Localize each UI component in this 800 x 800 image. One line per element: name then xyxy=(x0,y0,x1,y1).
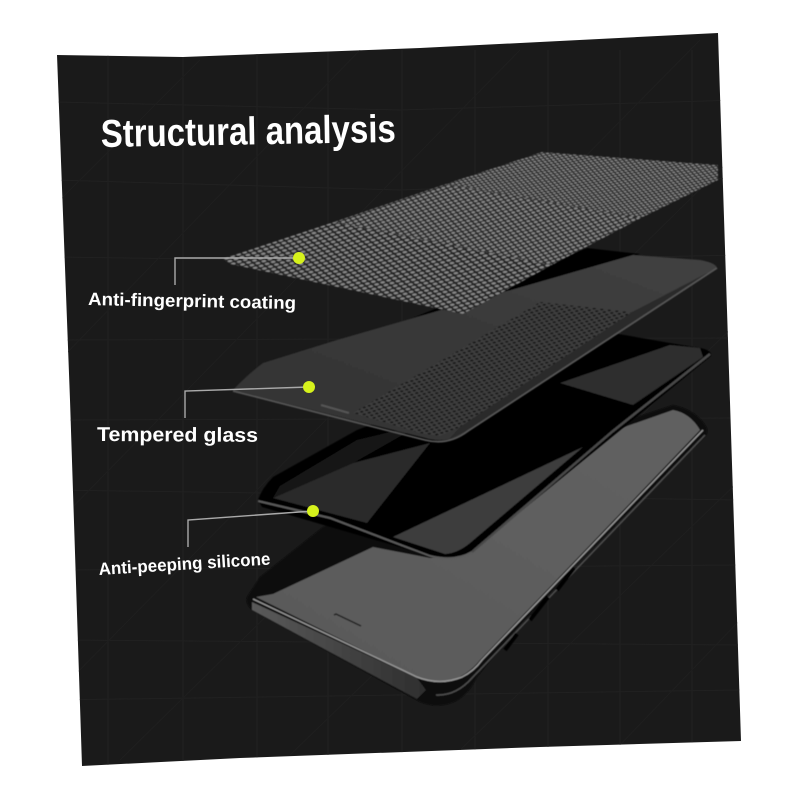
phone metal band xyxy=(252,602,426,699)
callout: tempered glass xyxy=(97,381,315,447)
title: Structural analysis xyxy=(100,108,396,156)
film dark inner pane xyxy=(273,425,420,498)
leader line xyxy=(188,511,313,547)
leader line xyxy=(175,258,299,285)
infographic canvas xyxy=(57,33,741,766)
film frame xyxy=(258,333,711,558)
callout: anti-peeping silicone xyxy=(98,505,319,579)
phone metal edge xyxy=(253,430,703,682)
glass dark right band xyxy=(448,268,717,440)
callout: anti-fingerprint coating xyxy=(88,252,305,313)
marker dot xyxy=(293,252,305,264)
leader line xyxy=(185,387,309,418)
panel: dark background sheet xyxy=(57,33,741,766)
label: Anti-peeping silicone xyxy=(98,549,271,579)
layer: tempered glass xyxy=(233,248,717,442)
label: Anti-fingerprint coating xyxy=(88,289,296,313)
glass lower edge xyxy=(233,268,717,442)
film grey left pane xyxy=(273,443,430,523)
mesh far section xyxy=(446,152,718,218)
film grey upper pane xyxy=(560,345,703,405)
layer: anti-peeping silicone film xyxy=(258,333,711,558)
phone side buttons xyxy=(505,568,574,650)
phone screen xyxy=(256,410,700,682)
marker dot xyxy=(307,505,319,517)
phone speaker xyxy=(334,614,361,626)
marker dot xyxy=(303,381,315,393)
layer: anti-fingerprint mesh xyxy=(222,152,718,314)
mesh near section xyxy=(222,222,552,314)
label: Tempered glass xyxy=(97,424,258,447)
film grey lower pane xyxy=(393,447,583,554)
phone: complete device xyxy=(247,405,707,706)
dotted area of glass xyxy=(353,302,632,436)
phone body xyxy=(247,405,707,706)
glass panel xyxy=(233,255,717,440)
glass speaker xyxy=(321,405,349,413)
film edge highlight xyxy=(258,501,472,558)
black shadow above glass xyxy=(337,248,640,349)
mesh middle section xyxy=(334,184,641,265)
